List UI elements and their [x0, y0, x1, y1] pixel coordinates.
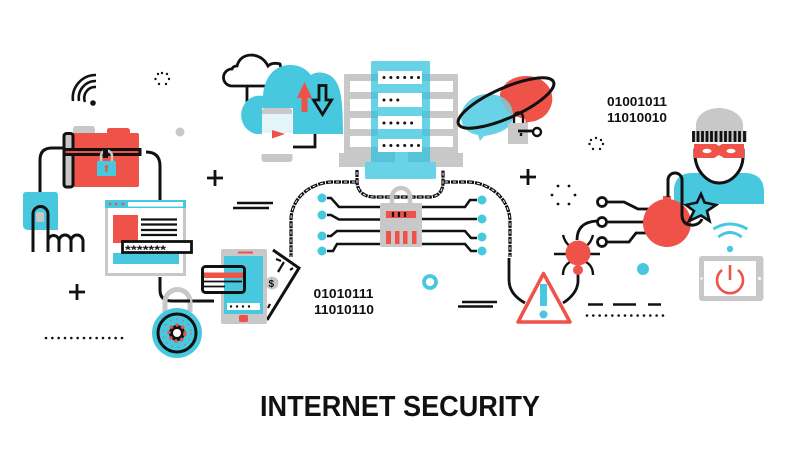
icon: linked speech bubbles with orbit — [452, 68, 560, 141]
circuit terminal dots — [318, 194, 486, 256]
icon: browser login window: ******* — [125, 243, 166, 257]
icon: thief with mask — [674, 108, 764, 204]
icon: banknote behind phone: $ — [268, 279, 274, 290]
icon: banknote behind phone — [266, 250, 299, 320]
dash lines left — [233, 203, 273, 208]
dash lines right — [588, 303, 661, 306]
icon: smartphone — [221, 249, 267, 324]
blue tower — [365, 61, 436, 179]
blue ring — [424, 276, 436, 288]
icon: star spark — [686, 194, 716, 221]
title: INTERNET SECURITY — [260, 391, 540, 423]
icon: fingerprint touch hand — [23, 192, 83, 252]
icon: server rack — [339, 61, 463, 179]
circuit wires to bomb — [598, 198, 650, 246]
icon: small padlock with key — [508, 112, 541, 144]
back gray rack — [339, 74, 463, 167]
left connector wires — [40, 148, 214, 301]
icon: blue cloud with transfer arrows — [241, 65, 343, 147]
icon: red bomb with fuse — [643, 173, 702, 247]
icon: warning triangle with wires — [509, 258, 578, 322]
icon: browser login window — [105, 200, 192, 274]
plus signs left — [69, 170, 223, 300]
icon: black outline cloud — [224, 55, 285, 86]
binary code lower: 01010111 — [314, 286, 374, 301]
binary code upper — [607, 94, 667, 125]
icon: video device — [262, 108, 293, 162]
blue dot — [637, 263, 649, 275]
decorative dotted circle — [154, 72, 170, 85]
binary code lower: 11010110 — [314, 302, 374, 317]
plus sign right — [520, 169, 536, 185]
slots with status dots — [378, 71, 422, 152]
icon: combination padlock — [152, 290, 202, 358]
icon: wifi signal — [73, 75, 96, 106]
decorative dotted circle large — [551, 185, 576, 205]
binary code upper: 01001011 — [607, 94, 667, 109]
dotted line right — [587, 314, 663, 317]
dash lines center — [458, 302, 497, 306]
icon: credit card — [202, 266, 244, 292]
icon: locked folder — [64, 126, 140, 187]
beanie — [696, 108, 743, 133]
mask — [694, 144, 744, 158]
binary code upper: 11010010 — [607, 110, 667, 125]
icon: central padlock — [380, 188, 422, 247]
face — [695, 150, 743, 183]
icon: spider bug — [554, 221, 600, 275]
body — [674, 173, 764, 204]
circuit board traces — [327, 198, 477, 251]
chains connecting server to network lock — [291, 170, 510, 257]
decorative dotted circle small — [588, 137, 604, 150]
binary code lower — [314, 286, 374, 317]
icon: tablet with power button — [699, 256, 764, 301]
gray dot — [176, 128, 184, 136]
dotted line left — [46, 337, 122, 339]
icon: wifi signal blue — [713, 224, 747, 252]
